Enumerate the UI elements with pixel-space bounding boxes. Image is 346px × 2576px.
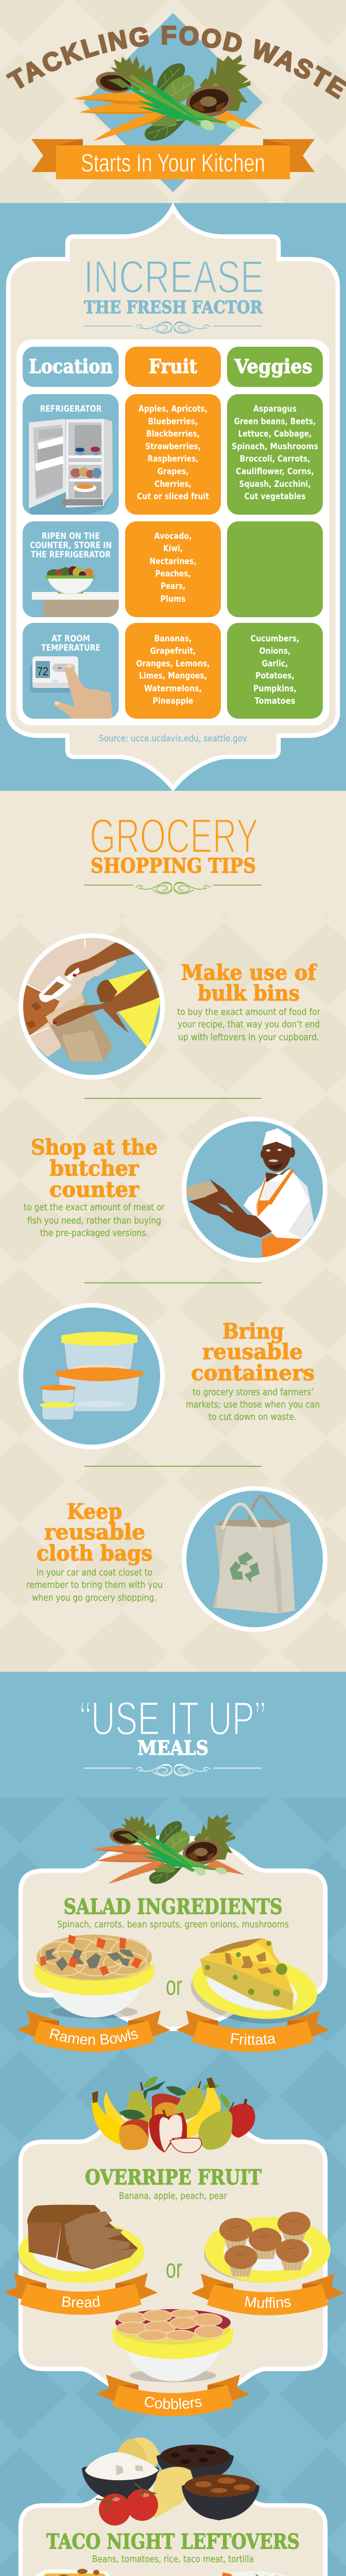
section background: grocery tips xyxy=(0,791,346,1672)
title: overripe fruit: OVERRIPE FRUIT xyxy=(85,2165,262,2190)
heading: use it up: “USE IT UP” xyxy=(80,1692,266,1745)
cell: refrigerator fruit: Raspberries, xyxy=(147,454,199,464)
header blue diamond xyxy=(83,13,263,192)
cell: refrigerator fruit xyxy=(125,394,221,515)
cell: room temperature fruit: Oranges, Lemons, xyxy=(136,658,210,669)
cell: ripen fruit: Peaches, xyxy=(155,569,191,579)
cell: room temperature fruit: Bananas, xyxy=(154,634,192,644)
cell: room temperature veggies: Tomatoes xyxy=(254,696,296,706)
header background xyxy=(0,0,346,203)
ornament divider xyxy=(84,321,262,333)
cell: refrigerator veggies xyxy=(227,394,323,515)
heading: increase: INCREASE xyxy=(83,251,264,302)
label: cobblers: Cobblers xyxy=(145,2397,202,2409)
tip text: butcher counter: Shop at the xyxy=(31,1135,158,1160)
label: bread: Bread xyxy=(62,2296,100,2308)
cell: room temperature fruit xyxy=(125,623,221,719)
icon: thermostat and hand xyxy=(30,656,113,719)
tip text: bulk bins: to buy the exact amount of food for xyxy=(177,1007,321,1018)
cell: at room temperature: AT ROOM xyxy=(51,634,90,644)
illustration: cobbler bowl xyxy=(113,2309,233,2382)
cell: ripen fruit: Avocado, xyxy=(154,531,192,541)
header: veggies: Veggies xyxy=(234,355,312,378)
title: tackling food waste: TACKLING FOOD WASTE xyxy=(6,26,346,99)
illustration: muffins on plate xyxy=(204,2212,331,2283)
icon: taco ingredients xyxy=(82,2437,260,2526)
tip text: containers: to cut down on waste. xyxy=(209,1412,297,1422)
section background: use it up meals xyxy=(0,1672,346,2576)
tip illustration: containers xyxy=(19,1303,165,1449)
cell: at room temperature xyxy=(23,623,119,719)
tip text: cloth bags: in your car and coat closet to xyxy=(37,1568,152,1578)
illustration: burrito bowl xyxy=(193,2571,313,2576)
tip text: cloth bags xyxy=(26,1499,163,1603)
panel: taco night leftovers xyxy=(19,2437,327,2576)
cell: ripen on the counter: THE REFRIGERATOR xyxy=(31,550,111,560)
label: cobblers xyxy=(96,2375,250,2416)
or: or xyxy=(166,1971,182,2001)
tip text: cloth bags: remember to bring them with you xyxy=(26,1580,163,1590)
section background: fresh factor xyxy=(0,203,346,791)
cell: room temperature veggies: Pumpkins, xyxy=(253,684,297,694)
cell: refrigerator veggies: Cauliflower, Corns, xyxy=(236,467,314,477)
tip illustration: bulk bins xyxy=(15,922,165,1080)
cell: ripen veggies (empty) xyxy=(227,521,323,617)
cell: refrigerator fruit: Cherries, xyxy=(154,479,192,489)
source note: Source: ucce.ucdavis.edu, seattle.gov xyxy=(99,734,247,744)
header: fruit: Fruit xyxy=(149,355,197,378)
cell: refrigerator veggies: Cut vegetables xyxy=(244,492,306,502)
storage table xyxy=(16,340,330,725)
panel: overripe fruit xyxy=(4,2076,344,2416)
cell: ripen fruit: Nectarines, xyxy=(149,556,197,567)
cell: refrigerator fruit: Strawberries, xyxy=(145,442,201,452)
ingredient list: Beans, tomatoes, rice, taco meat, tortilla xyxy=(92,2554,254,2565)
tip text: containers xyxy=(186,1319,320,1422)
cell: room temperature fruit: Pineapple xyxy=(152,696,194,706)
heading: the fresh factor: THE FRESH FACTOR xyxy=(84,297,263,318)
cell: room temperature veggies: Potatoes, xyxy=(255,671,295,681)
cell: refrigerator veggies: Green beans, Beets, xyxy=(234,416,316,427)
cell: refrigerator veggies: Lettuce, Cabbage, xyxy=(238,429,312,439)
ingredient list: Spinach, carrots, bean sprouts, green onions, mushrooms xyxy=(57,1920,289,1930)
tip text: bulk bins: bulk bins xyxy=(198,981,300,1006)
cell: refrigerator veggies: Asparagus xyxy=(253,404,297,414)
tip text: cloth bags: when you go grocery shopping. xyxy=(32,1593,157,1603)
cell: room temperature fruit: Limes, Mangoes, xyxy=(139,671,207,681)
tip text: containers: Bring xyxy=(222,1319,284,1344)
icon: fruit bowl on counter xyxy=(32,566,119,617)
tip text: bulk bins xyxy=(177,960,321,1043)
illustration: frittata plate xyxy=(187,1938,321,2031)
tip text: cloth bags: cloth bags xyxy=(37,1541,152,1566)
cell: refrigerator fruit: Blackberries, xyxy=(146,429,200,439)
ornament divider xyxy=(84,882,262,894)
cell: ripen on the counter xyxy=(23,521,119,617)
tip text: bulk bins: Make use of xyxy=(181,960,317,985)
illustration: bread on plate xyxy=(18,2205,144,2283)
cell: refrigerator fruit: Blueberries, xyxy=(148,416,198,427)
title: salad ingredients: SALAD INGREDIENTS xyxy=(64,1894,282,1919)
cell: room temperature fruit: Watermelons, xyxy=(144,684,202,694)
icon: open refrigerator xyxy=(29,419,113,515)
cell: refrigerator xyxy=(23,394,119,515)
banner: starts in your kitchen xyxy=(31,139,315,179)
tip text: containers: to grocery stores and farmers’ xyxy=(193,1387,314,1398)
heading: shopping tips: SHOPPING TIPS xyxy=(91,854,256,878)
tip text: butcher counter xyxy=(24,1135,165,1239)
cell: at room temperature: TEMPERATURE xyxy=(41,643,100,653)
tip text: butcher counter: butcher xyxy=(49,1156,140,1181)
illustration: ramen bowl xyxy=(34,1935,154,2019)
header: fruit xyxy=(125,347,221,387)
ornament divider xyxy=(84,1764,262,1776)
tip text: containers: markets; use those when you can xyxy=(186,1400,320,1410)
tip text: butcher counter: to get the exact amount of meat or xyxy=(24,1202,165,1213)
tip text: bulk bins: up with leftovers in your cupboard. xyxy=(178,1032,319,1043)
cell: room temperature veggies: Cucumbers, xyxy=(250,634,300,644)
label: frittata xyxy=(176,2010,330,2052)
icon: thermostat and hand: 72 xyxy=(37,665,48,678)
cell: refrigerator fruit: Apples, Apricots, xyxy=(139,404,207,414)
label: muffins xyxy=(191,2274,344,2315)
cell: room temperature veggies: Onions, xyxy=(260,646,290,656)
cell: ripen fruit: Pears, xyxy=(161,581,185,591)
cell: ripen fruit: Kiwi, xyxy=(163,544,183,554)
tip text: containers: reusable xyxy=(202,1340,303,1364)
tip text: containers: containers xyxy=(191,1361,315,1385)
icon: fruit pile xyxy=(92,2077,255,2153)
title: taco night leftovers: TACO NIGHT LEFTOVERS xyxy=(46,2530,300,2554)
cell: ripen fruit xyxy=(125,521,221,617)
tip text: butcher counter: the pre-packaged versions. xyxy=(40,1228,148,1239)
cell: ripen on the counter: RIPEN ON THE xyxy=(42,531,100,541)
tip text: cloth bags: Keep xyxy=(67,1499,122,1524)
label: frittata: Frittata xyxy=(231,2033,276,2045)
icon: vegetable bunch xyxy=(91,1814,245,1884)
banner: starts in your kitchen: Starts In Your Kitchen xyxy=(81,149,265,177)
cell: room temperature veggies: Garlic, xyxy=(262,658,288,669)
panel: fresh factor card xyxy=(8,207,338,788)
cell: refrigerator: REFRIGERATOR xyxy=(40,404,102,414)
cell: refrigerator fruit: Grapes, xyxy=(158,467,188,477)
label: ramen bowls xyxy=(17,2010,170,2052)
tip text: bulk bins: your recipe, that way you don’t end xyxy=(178,1020,320,1030)
cell: refrigerator veggies: Spinach, Mushrooms xyxy=(232,442,318,452)
label: muffins: Muffins xyxy=(245,2296,291,2308)
tip illustration: cloth bag xyxy=(182,1486,327,1632)
tip text: cloth bags: reusable xyxy=(44,1520,145,1545)
header: location: Location xyxy=(29,355,113,378)
label: ramen bowls: Ramen Bowls xyxy=(49,2028,138,2045)
cell: room temperature fruit: Grapefruit, xyxy=(150,646,196,656)
cell: refrigerator fruit: Cut or sliced fruit xyxy=(137,492,209,502)
tip text: butcher counter: fish you need, rather than buying xyxy=(27,1216,161,1226)
cell: ripen fruit: Plums xyxy=(161,594,185,604)
tip text: butcher counter: counter xyxy=(49,1177,140,1202)
cell: refrigerator veggies: Squash, Zucchini, xyxy=(239,479,311,489)
cell: ripen on the counter: COUNTER, STORE IN xyxy=(30,540,112,551)
header: location xyxy=(23,347,119,387)
panel: salad ingredients xyxy=(17,1814,330,2052)
heading: meals: MEALS xyxy=(137,1736,209,1759)
label: bread xyxy=(4,2273,158,2315)
cell: room temperature veggies xyxy=(227,623,323,719)
heading: grocery: GROCERY xyxy=(90,809,258,863)
cell: refrigerator veggies: Broccoli, Carrots, xyxy=(240,454,310,464)
tip illustration: butcher xyxy=(182,1117,330,1262)
or: or xyxy=(166,2254,182,2284)
header: veggies xyxy=(227,347,323,387)
ingredient list: Banana, apple, peach, pear xyxy=(119,2191,228,2201)
icon: vegetable bunch xyxy=(73,55,262,141)
illustration: mexican casserole xyxy=(29,2569,153,2576)
